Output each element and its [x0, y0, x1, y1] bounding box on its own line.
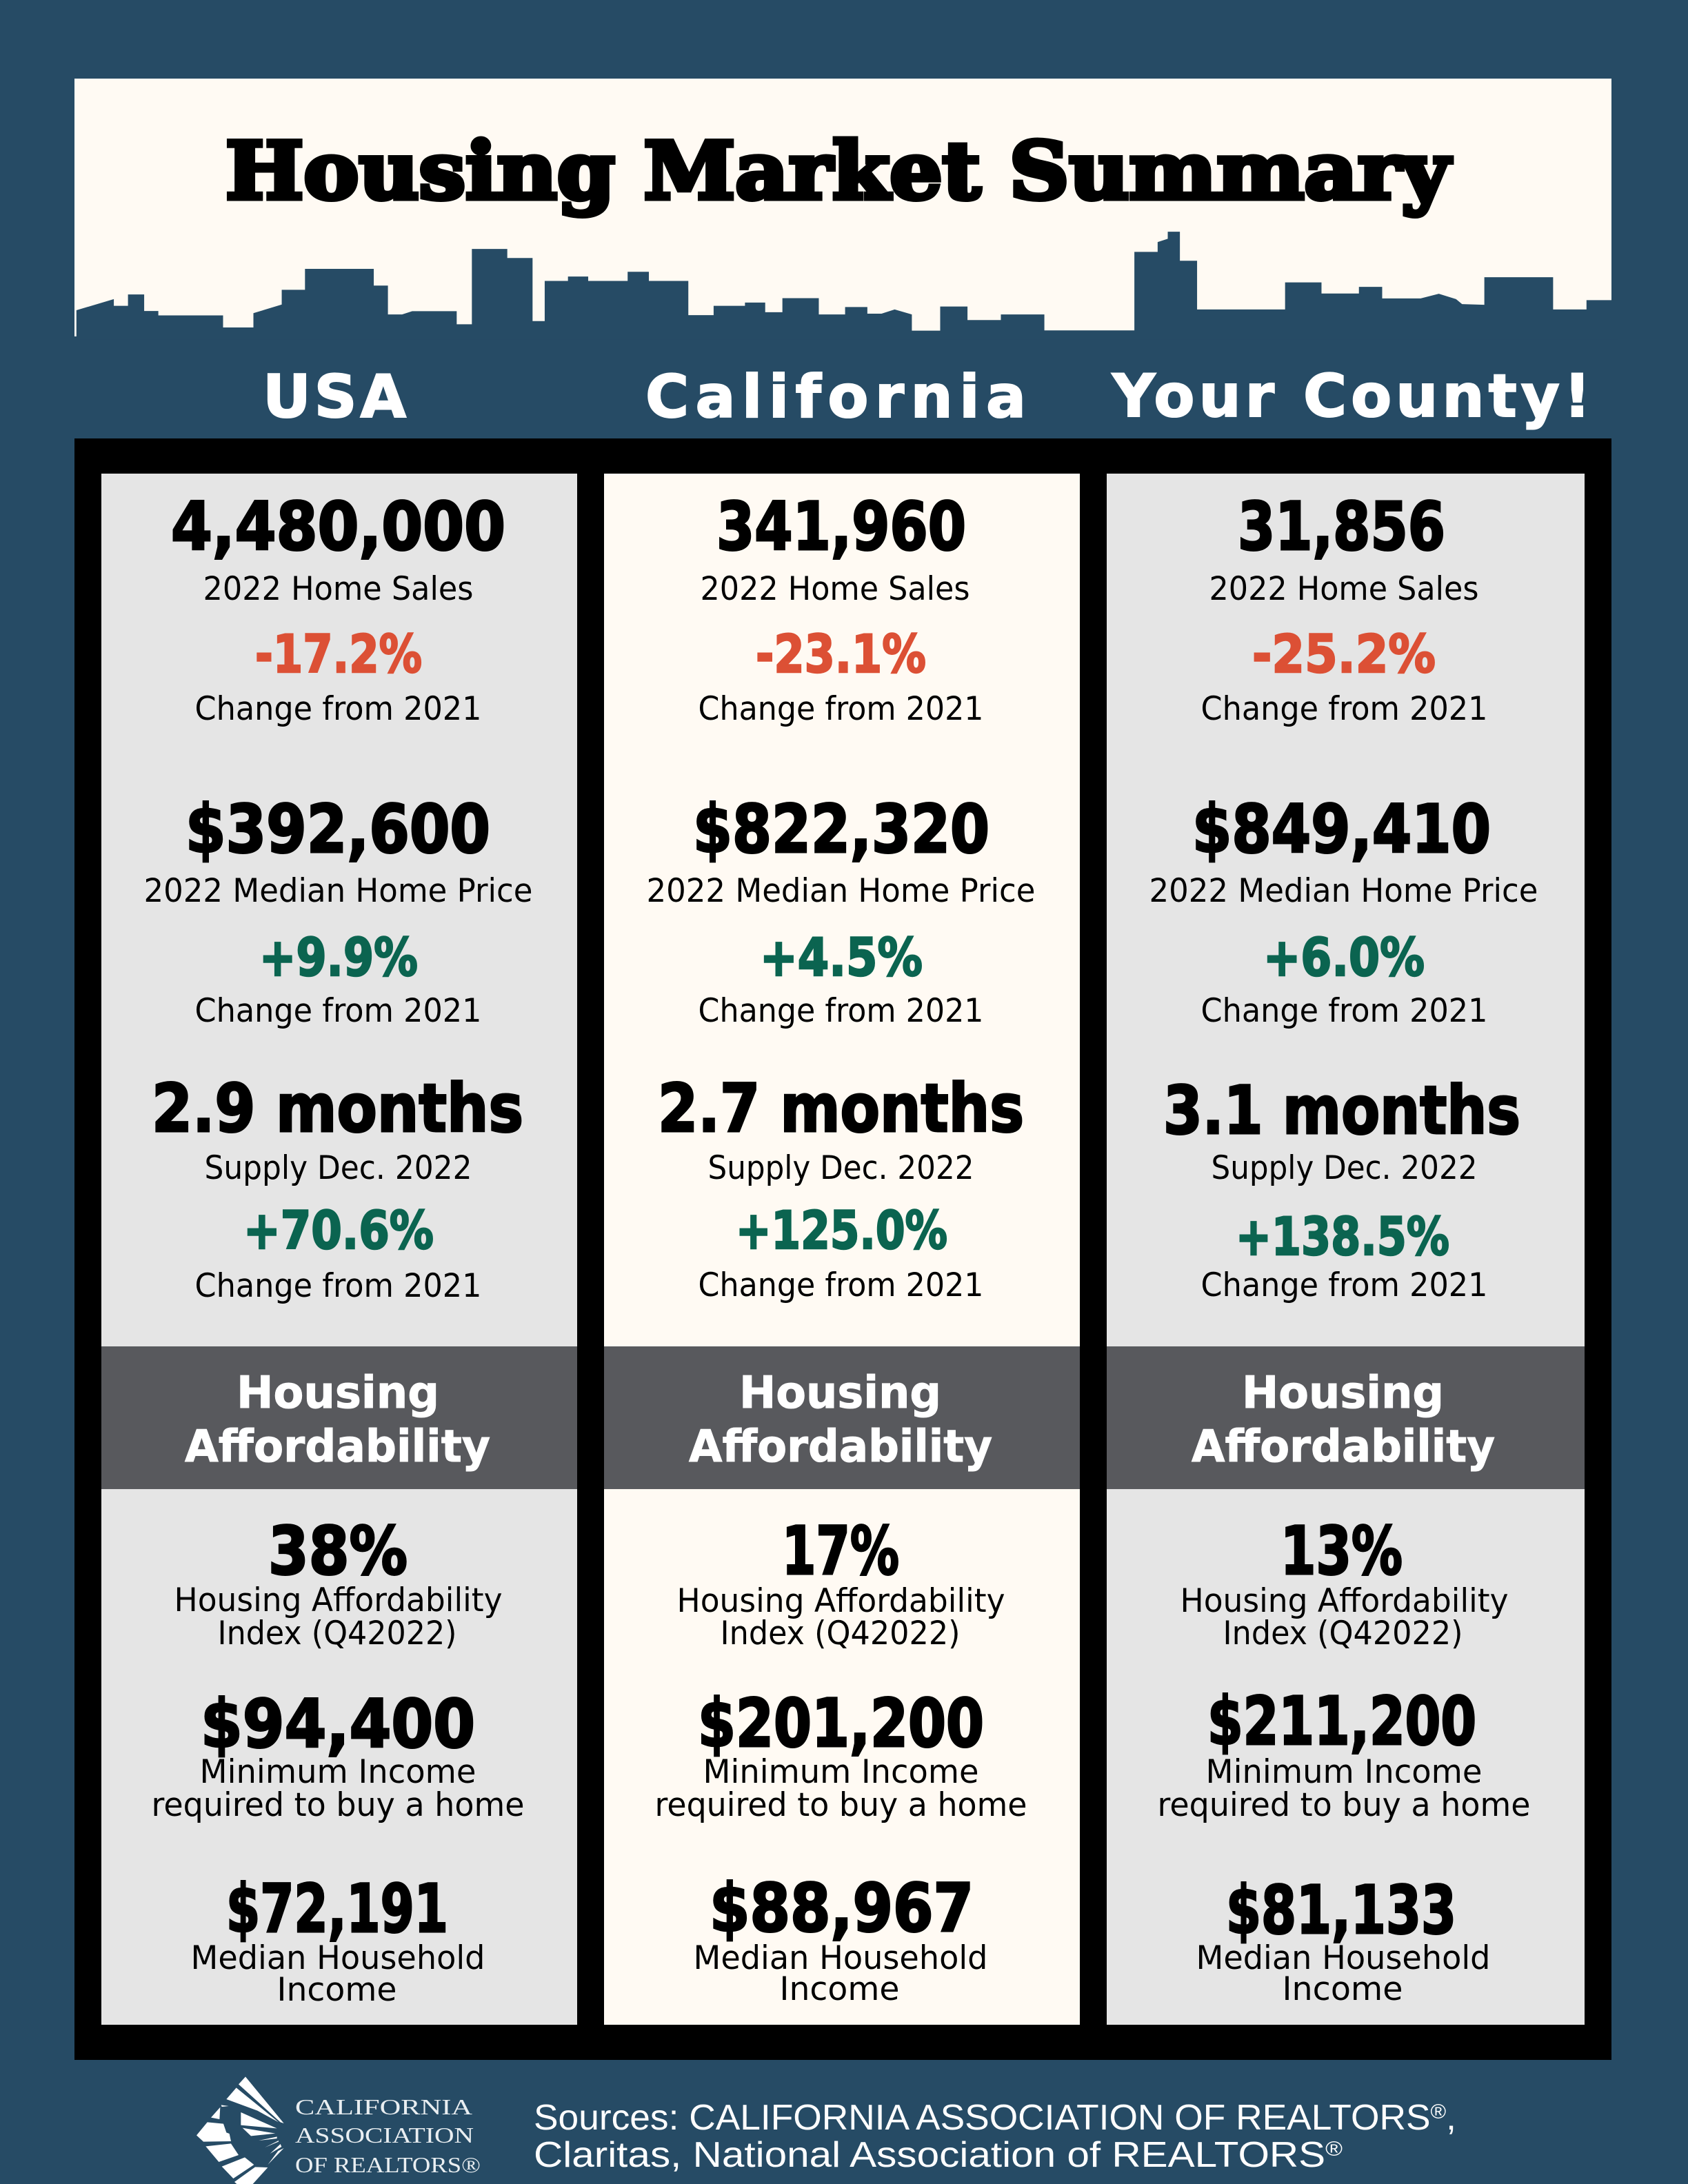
- stat: California supply: +125.0%: [736, 1200, 947, 1261]
- stat: County median household income: [1196, 1872, 1491, 2008]
- stat: USA median price: +9.9%: [259, 927, 418, 988]
- stat: USA home sales: -17.2%: [255, 623, 422, 685]
- sources text: [534, 2098, 1456, 2175]
- stat: USA minimum income: $94,400: [201, 1686, 475, 1763]
- stat: California affordability index: Housing Affordability: [677, 1582, 1005, 1620]
- column heading: Your County: Your County!: [1112, 362, 1591, 431]
- stat: California supply: Change from 2021: [698, 1266, 983, 1304]
- panel: California: [604, 474, 1080, 2025]
- stat: County home sales: 2022 Home Sales: [1209, 570, 1478, 608]
- stat: County median price: 2022 Median Home Price: [1149, 872, 1538, 910]
- stat: USA affordability index: Housing Affordability: [174, 1581, 502, 1619]
- stat: California median price: [647, 791, 1036, 1030]
- logo wordmark: CALIFORNIA: [295, 2094, 472, 2119]
- stat: County affordability index: Index (Q42022): [1223, 1615, 1463, 1652]
- stat: County home sales: Change from 2021: [1201, 690, 1488, 728]
- stat: County median price: +6.0%: [1263, 927, 1425, 988]
- stat: California minimum income: $201,200: [698, 1685, 984, 1762]
- stat: USA median price: $392,600: [185, 791, 490, 868]
- stat: California median price: $822,320: [693, 791, 989, 868]
- stat: USA supply: Change from 2021: [194, 1267, 481, 1305]
- stat: County home sales: -25.2%: [1252, 623, 1436, 685]
- black table frame: [74, 438, 1611, 2060]
- stat: County median household income: Median Household: [1196, 1939, 1491, 1977]
- panel background Your County: [1107, 474, 1585, 2025]
- panel: USA: [101, 474, 577, 2025]
- stat: USA median household income: [190, 1870, 485, 2009]
- panel: Your County: [1107, 474, 1585, 2025]
- stat: County median price: Change from 2021: [1201, 992, 1488, 1030]
- stat: California minimum income: required to buy a home: [655, 1786, 1027, 1824]
- band: USA housing affordability: [101, 1346, 577, 1489]
- stat: California affordability index: [677, 1513, 1005, 1652]
- logo wordmark: OF REALTORS®: [295, 2152, 481, 2177]
- band: California housing affordability: [604, 1346, 1080, 1489]
- stat: County affordability index: Housing Affordability: [1180, 1582, 1509, 1620]
- stat: California median price: +4.5%: [760, 927, 923, 988]
- stat: USA minimum income: required to buy a home: [152, 1786, 524, 1824]
- stat: County supply: Change from 2021: [1201, 1266, 1488, 1304]
- stat: California home sales: -23.1%: [756, 623, 926, 685]
- stat: USA median price: [143, 791, 532, 1030]
- stat: USA affordability index: [174, 1513, 502, 1652]
- title: Housing Market Summary: [225, 125, 1451, 217]
- stat: County supply: +138.5%: [1236, 1206, 1449, 1267]
- stat: County home sales: 31,856: [1238, 488, 1445, 565]
- stat: USA affordability index: 38%: [268, 1513, 408, 1590]
- stat: County affordability index: 13%: [1280, 1513, 1403, 1590]
- stat: California minimum income: Minimum Income: [703, 1753, 979, 1791]
- stat: California median household income: [694, 1870, 987, 2008]
- stat: USA median price: 2022 Median Home Price: [143, 872, 532, 910]
- stat: County supply: Supply Dec. 2022: [1211, 1149, 1477, 1187]
- stat: USA median household income: Median Household: [190, 1939, 485, 1977]
- stat: California minimum income: [655, 1685, 1027, 1824]
- stat: County median price: [1149, 791, 1538, 1030]
- stat: USA median price: Change from 2021: [194, 992, 481, 1030]
- stat: California affordability index: 17%: [782, 1513, 899, 1590]
- stat: California supply: [658, 1070, 1024, 1304]
- stat: USA median household income: $72,191: [226, 1870, 448, 1948]
- stat: California home sales: [698, 488, 983, 728]
- stat: California affordability index: Index (Q42022): [720, 1615, 960, 1652]
- stat: USA home sales: [171, 488, 505, 728]
- city skyline silhouette: [76, 232, 1611, 336]
- stat: County minimum income: $211,200: [1207, 1683, 1476, 1760]
- band: County housing affordability: [1107, 1346, 1585, 1489]
- stat: County affordability index: [1180, 1513, 1509, 1652]
- stat: California median price: 2022 Median Home Price: [647, 872, 1036, 910]
- stat: USA median household income: Income: [277, 1971, 397, 2009]
- band: USA housing affordability: Affordability: [185, 1422, 490, 1473]
- stat: USA home sales: Change from 2021: [194, 690, 481, 728]
- stat: County minimum income: Minimum Income: [1205, 1753, 1483, 1791]
- stat: California median price: Change from 2021: [698, 992, 983, 1030]
- stat: California home sales: 2022 Home Sales: [701, 570, 969, 608]
- sources text: Sources: CALIFORNIA ASSOCIATION OF REALTORS: [534, 2098, 1409, 2138]
- stat: USA minimum income: [152, 1686, 524, 1824]
- stat: USA supply: Supply Dec. 2022: [204, 1149, 472, 1187]
- band: USA housing affordability: Housing: [237, 1368, 439, 1419]
- stat: USA supply: +70.6%: [243, 1200, 434, 1261]
- sources text: ,: [1446, 2098, 1456, 2138]
- stat: County supply: 3.1 months: [1163, 1072, 1520, 1149]
- stat: California median household income: $88,967: [710, 1870, 974, 1947]
- column heading: California: California: [645, 363, 1026, 432]
- stat: County median household income: $81,133: [1226, 1872, 1456, 1949]
- panel background USA: [101, 474, 577, 2025]
- icon: California Association of Realtors logo mark: [197, 2076, 284, 2184]
- stat: USA minimum income: Minimum Income: [200, 1753, 476, 1791]
- logo wordmark: [295, 2094, 481, 2177]
- sources text: ®: [1431, 2101, 1446, 2123]
- stat: USA supply: 2.9 months: [152, 1070, 523, 1147]
- panel background California: [604, 474, 1080, 2025]
- band: California housing affordability: Affordability: [689, 1422, 992, 1473]
- column heading: USA: USA: [263, 363, 406, 432]
- stat: USA affordability index: Index (Q42022): [218, 1615, 456, 1652]
- stat: County median household income: Income: [1283, 1970, 1403, 2008]
- sources text: Claritas, National Association of REALTORS: [534, 2135, 1238, 2175]
- stat: USA supply: [152, 1070, 523, 1305]
- stat: USA home sales: 2022 Home Sales: [203, 570, 473, 608]
- stat: County minimum income: required to buy a home: [1157, 1786, 1531, 1824]
- stat: California supply: Supply Dec. 2022: [707, 1149, 974, 1187]
- stat: USA home sales: 4,480,000: [171, 488, 505, 565]
- band: County housing affordability: Affordability: [1192, 1422, 1495, 1473]
- band: California housing affordability: Housing: [739, 1368, 941, 1419]
- header banner: [74, 79, 1611, 336]
- stat: California median household income: Income: [779, 1970, 899, 2008]
- stat: County home sales: [1201, 488, 1488, 728]
- stat: California median household income: Median Household: [694, 1939, 987, 1977]
- logo wordmark: ASSOCIATION: [295, 2123, 474, 2147]
- stat: County minimum income: [1157, 1683, 1531, 1824]
- stat: County median price: $849,410: [1192, 791, 1491, 868]
- sources text: ®: [1325, 2138, 1343, 2161]
- stat: California supply: 2.7 months: [658, 1070, 1024, 1147]
- stat: California home sales: Change from 2021: [698, 690, 983, 728]
- stat: County supply: [1163, 1072, 1520, 1304]
- band: County housing affordability: Housing: [1242, 1368, 1444, 1419]
- stat: California home sales: 341,960: [716, 488, 966, 565]
